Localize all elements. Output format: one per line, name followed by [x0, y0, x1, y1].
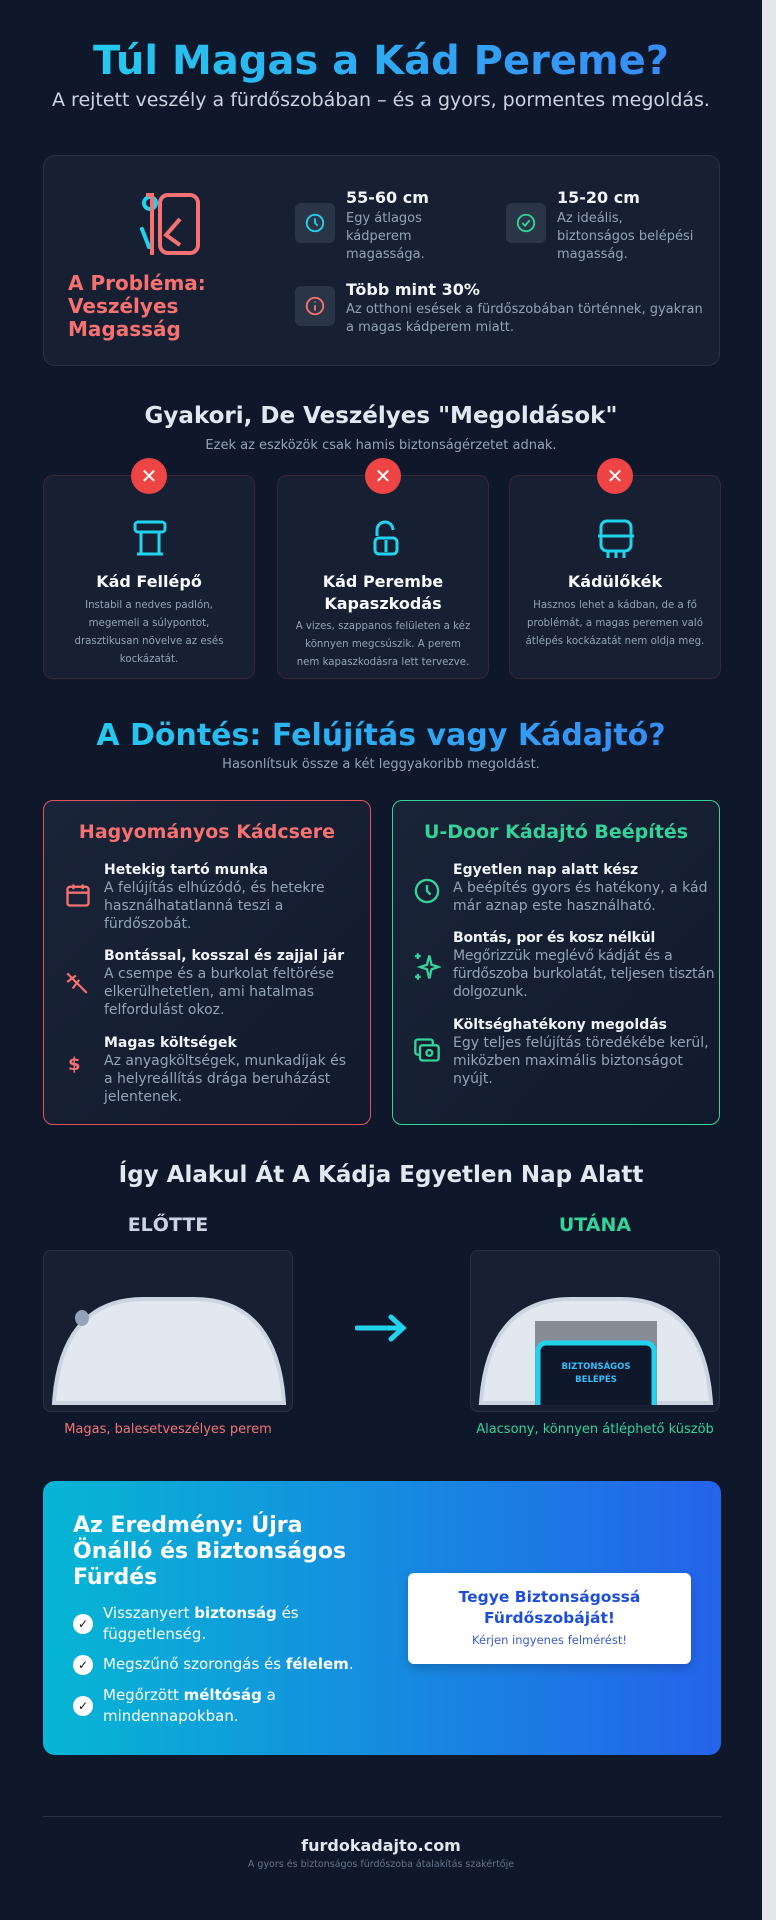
heading: common solutions: Gyakori, De Veszélyes "Megoldások": [145, 403, 617, 429]
item: cost effective: [414, 1017, 709, 1087]
icon: person and tub: [140, 193, 200, 255]
after image: BELÉPÉS: [575, 1373, 617, 1385]
title: [0, 36, 762, 86]
CTA button: Kérjen ingyenes felmérést!: [472, 1633, 627, 1647]
checklist: ✓: [78, 1699, 88, 1713]
icon: seat: [598, 520, 634, 558]
item: cost: $: [68, 1054, 81, 1075]
item: cost effective: Költséghatékony megoldás: [453, 1017, 667, 1033]
card: grab rim: Kád Perembe: [323, 572, 443, 591]
subtitle: A rejtett veszély a fürdőszobában – és a gyors, pormentes megoldás.: [52, 89, 710, 111]
heading: decision: [0, 716, 762, 756]
card: bath seats: [509, 475, 721, 679]
stat: 15-20 cm: [506, 188, 693, 262]
after image: [470, 1250, 720, 1412]
caption: after: Alacsony, könnyen átléphető küszöb: [476, 1422, 714, 1437]
item: weeks: [66, 862, 325, 932]
item: no dust: [415, 930, 714, 1000]
panel: U-Door: [392, 800, 720, 1125]
result heading: Az Eredmény: Újra Önálló és Biztonságos Fürdés: [73, 1513, 346, 1590]
item: demolition: [66, 948, 344, 1018]
CTA button: Tegye Biztonságossá: [459, 1588, 640, 1606]
item: cost: Az anyagköltségek, munkadíjak és a helyreállítás drága beruházást jelentenek.: [104, 1053, 346, 1105]
panel: traditional: Hagyományos Kádcsere: [79, 821, 335, 843]
problem heading: Veszélyes: [68, 294, 178, 318]
subheading: Ezek az eszközök csak hamis biztonságérzetet adnak.: [205, 438, 557, 453]
card: grab rim: Kapaszkodás: [324, 594, 442, 613]
heading: decision: A Döntés: Felújítás vagy Kádajtó?: [96, 718, 666, 753]
card: bath seats: Kádülőkék: [568, 572, 662, 591]
problem heading: Magasság: [68, 317, 181, 341]
checklist: Megőrzött méltóság a mindennapokban.: [103, 1686, 276, 1725]
stat: 30%: Az otthoni esések a fürdőszobában történnek, gyakran: [346, 302, 703, 317]
item: no dust: Megőrizzük meglévő kádját és a fürdőszoba burkolatát, teljesen tisztán dolgozunk.: [453, 948, 714, 1000]
panel: traditional: [43, 800, 371, 1125]
item: no dust: Bontás, por és kosz nélkül: [453, 930, 655, 946]
item: one day: A beépítés gyors és hatékony, a kád már aznap este használható.: [453, 880, 708, 914]
icon: step: [134, 520, 166, 556]
stat: 15-20 cm: 15-20 cm: [557, 188, 640, 207]
problem heading: [68, 271, 206, 341]
before image: [43, 1250, 293, 1412]
checklist: ✓: [78, 1617, 88, 1631]
stat: 30%: Több mint 30%: [346, 280, 480, 299]
stat: 30%: a magas kádperem miatt.: [346, 320, 514, 335]
stat: 55-60 cm: Egy átlagos kádperem magassága.: [346, 211, 425, 262]
card: step: [43, 475, 255, 679]
panel: result CTA: [43, 1481, 721, 1755]
checklist: ✓: [78, 1658, 88, 1672]
title: Túl Magas a Kád Pereme?: [93, 38, 669, 84]
stat: 30%: [295, 280, 703, 335]
stat: 55-60 cm: [295, 188, 429, 262]
card: grab rim: nem kapaszkodásra lett tervezve.: [297, 657, 469, 668]
item: demolition: Bontással, kosszal és zajjal jár: [104, 948, 344, 964]
checklist: Visszanyert biztonság és függetlenség.: [103, 1604, 299, 1643]
CTA button: [408, 1573, 691, 1664]
footer: furdokadajto.com: [301, 1836, 461, 1855]
label: before: ELŐTTE: [128, 1214, 208, 1236]
item: weeks: A felújítás elhúzódó, és hetekre használhatatlanná teszi a fürdőszobát.: [104, 880, 325, 932]
card: bath seats: Hasznos lehet a kádban, de a fő problémát, a magas peremen való átlépés kockázatát nem oldja meg.: [526, 600, 704, 647]
after image: BIZTONSÁGOS: [562, 1360, 630, 1372]
arrow: [355, 1314, 407, 1342]
icon: lock: [374, 520, 398, 556]
item: weeks: Hetekig tartó munka: [104, 862, 268, 878]
card: grab rim: könnyen megcsúszik. A perem: [305, 639, 461, 650]
caption: before: Magas, balesetveszélyes perem: [64, 1422, 272, 1437]
card: step: Kád Fellépő: [96, 572, 202, 591]
item: demolition: A csempe és a burkolat feltörése elkerülhetetlen, ami hatalmas felfordulást okoz.: [104, 966, 334, 1018]
card: grab rim: [277, 475, 489, 679]
stat: 55-60 cm: 55-60 cm: [346, 188, 429, 207]
stat: 15-20 cm: Az ideális, biztonságos belépési magasság.: [557, 211, 693, 262]
label: after: UTÁNA: [559, 1214, 631, 1236]
panel: U-Door: U-Door Kádajtó Beépítés: [424, 821, 688, 843]
item: cost: [68, 1035, 346, 1105]
card: step: Instabil a nedves padlón, megemeli a súlypontot, drasztikusan növelve az esés kockázatát.: [74, 600, 224, 665]
card: grab rim: ✕: [375, 464, 391, 488]
item: cost: Magas költségek: [104, 1035, 237, 1051]
item: cost effective: Egy teljes felújítás töredékébe kerül, miközben maximális biztonságot nyújt.: [453, 1035, 709, 1087]
card: grab rim: A vizes, szappanos felületen a kéz: [296, 621, 470, 632]
heading: transformation: Így Alakul Át A Kádja Egyetlen Nap Alatt: [119, 1162, 643, 1188]
subheading: Hasonlítsuk össze a két leggyakoribb megoldást.: [222, 757, 540, 772]
CTA button: Fürdőszobáját!: [484, 1609, 615, 1627]
checklist: Megszűnő szorongás és félelem.: [103, 1655, 354, 1673]
item: one day: [414, 862, 708, 914]
checklist: [73, 1604, 354, 1725]
item: one day: Egyetlen nap alatt kész: [453, 862, 638, 878]
card: step: ✕: [141, 464, 157, 488]
card: bath seats: ✕: [607, 464, 623, 488]
footer: [248, 1836, 514, 1870]
problem heading: A Probléma:: [68, 271, 206, 295]
panel: problem: [43, 155, 720, 366]
footer: A gyors és biztonságos fürdőszoba átalakítás szakértője: [248, 1859, 514, 1870]
